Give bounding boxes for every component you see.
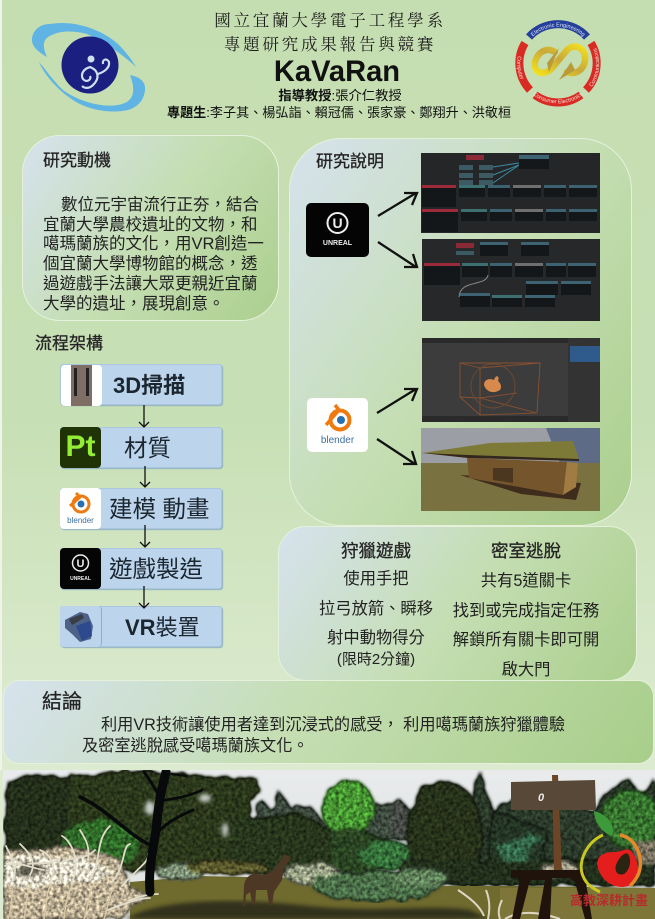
step: texture: Pt (66, 430, 96, 463)
text: ring labels: Communications (589, 48, 600, 86)
text: ring labels: Computer (516, 56, 524, 79)
panel: conclusion (3, 680, 654, 764)
text: escape room rules (453, 572, 599, 678)
heading: conclusion: 結論 (42, 691, 82, 713)
title: 專題研究成果報告與競賽 (224, 34, 436, 54)
advisor: 指導教授:張介仁教授 (278, 88, 402, 103)
sign post (552, 775, 562, 874)
step: modeling and animation: 建模 動畫 (109, 496, 210, 522)
icon: Blender (307, 398, 368, 452)
right foreground grass (458, 890, 560, 919)
text: logo caption: 高教深耕計畫 (570, 893, 648, 908)
score value: 0 (538, 792, 545, 804)
text: escape room rules: 共有5道關卡 (481, 572, 571, 590)
text: motivation body: 數位元宇宙流行正夯，結合 (61, 196, 259, 214)
step: VR device: VR裝置 (125, 615, 200, 640)
heading: process flow: 流程架構 (35, 334, 103, 353)
students: 專題生:李子其、楊弘詣、賴冠儒、張家豪、鄭翔升、洪敬桓 (167, 105, 511, 120)
image: blueprint screenshot one (421, 153, 600, 233)
text: motivation body (43, 196, 264, 313)
text: hunting rules (319, 570, 433, 647)
step: 3D scan (60, 364, 222, 405)
step: VR device (60, 606, 222, 647)
heading: escape room: 密室逃脫 (491, 541, 561, 561)
text: hunting rules: 射中動物得分 (327, 629, 425, 647)
arrows: unreal to blueprints (377, 192, 419, 268)
score sign (511, 780, 596, 810)
panel: games (278, 526, 637, 681)
heading: research motivation: 研究動機 (43, 151, 111, 170)
text: ring labels: Electronic Engineering (530, 22, 585, 37)
icon: Blender: blender (321, 435, 355, 446)
image: blender viewport (422, 338, 600, 422)
text: ring labels: Consumer Electronics (534, 92, 583, 104)
heading: hunting game: 狩獵遊戲 (341, 541, 411, 561)
text: conclusion body: 及密室逃脫感受噶瑪蘭族文化。 (82, 736, 309, 754)
panel: research description (289, 138, 632, 526)
ground (130, 876, 655, 919)
apple logo (570, 811, 648, 908)
arrows: blender to renders (376, 388, 419, 466)
logo: department ring emblem (515, 20, 601, 106)
step: 3D scan: 3D掃描 (113, 373, 185, 398)
bushes (156, 861, 578, 901)
sky gaps in crown (145, 794, 228, 837)
tree trunk and branches (80, 772, 202, 892)
text: motivation body: 噶瑪蘭族的文化，用VR創造一 (43, 235, 264, 253)
step: modeling and animation (60, 488, 222, 529)
flow chart (60, 364, 224, 648)
image: blueprint screenshot two (422, 239, 600, 321)
far trees (250, 770, 655, 870)
text: escape room rules: 啟大門 (502, 660, 550, 678)
icon: Unreal Engine: UNREAL (323, 240, 353, 247)
column: hunting game (319, 541, 433, 668)
title: 國立宜蘭大學電子工程學系 (214, 11, 446, 30)
text: conclusion body (82, 716, 565, 754)
step: texture (60, 427, 222, 468)
text: motivation body: 過遊戲手法讓大眾更親近宜蘭 (43, 275, 258, 293)
step: modeling and animation: blender (67, 516, 94, 525)
heading: research description: 研究說明 (316, 152, 384, 171)
left edge strip (0, 0, 2, 919)
text: motivation body: 宜蘭大學農校遺址的文物，和 (43, 216, 258, 234)
column: escape room (453, 541, 599, 678)
flow arrows (138, 405, 150, 609)
text: escape room rules: 找到或完成指定任務 (453, 602, 599, 620)
text: ring labels (516, 22, 600, 104)
text: hunting rules: 使用手把 (343, 570, 409, 588)
text: time limit: (限時2分鐘) (337, 651, 415, 668)
step: texture: 材質 (124, 435, 171, 461)
step: game production: UNREAL (70, 576, 91, 582)
icon: Unreal Engine (306, 203, 369, 257)
text: escape room rules: 解鎖所有關卡即可開 (453, 631, 599, 649)
project name: KaVaRan (274, 55, 400, 88)
image: wooden hut render (421, 428, 600, 511)
foliage masses (6, 770, 655, 885)
step: game production: 遊戲製造 (109, 556, 203, 582)
panel: research motivation (22, 135, 279, 321)
step: game production: U (77, 558, 85, 570)
image: VR forest hunting scene (0, 770, 655, 919)
text: motivation body: 個宜蘭大學博物館的概念，透 (43, 255, 258, 273)
step: game production (60, 548, 222, 589)
text: motivation body: 大學的遺址，展現創意。 (43, 295, 224, 313)
logo: university eye emblem (32, 23, 146, 112)
wooden stool (511, 870, 592, 919)
deer (243, 854, 291, 906)
icon: Unreal Engine: U (332, 215, 343, 231)
text: hunting rules: 拉弓放箭、瞬移 (319, 600, 433, 618)
title (214, 11, 446, 54)
white grass (4, 848, 150, 919)
text: conclusion body: 利用VR技術讓使用者達到沉浸式的感受， 利用噶瑪蘭族狩獵體驗 (101, 716, 565, 734)
